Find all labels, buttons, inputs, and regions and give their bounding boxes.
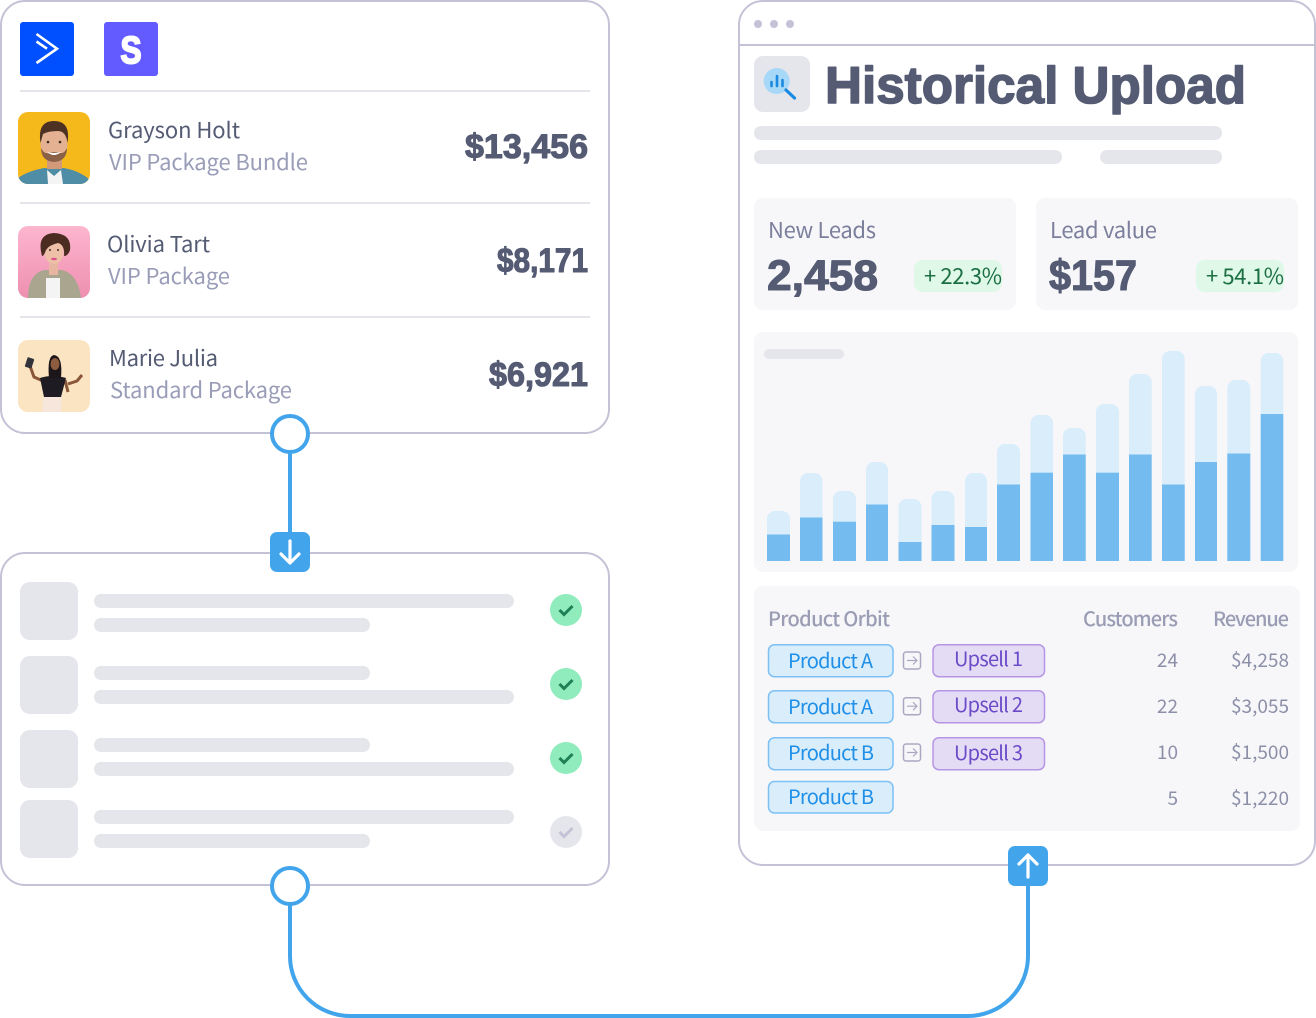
row: Marie Julia (18, 340, 588, 412)
name: Grayson Holt (108, 113, 240, 145)
stat card: Lead value (1036, 198, 1298, 310)
table row 1: $4,258 (1231, 646, 1289, 673)
table row 3: $1,500 (1231, 738, 1289, 765)
icon: check complete (550, 668, 582, 700)
stat card: New Leads: 2,458 (767, 252, 878, 300)
title: Historical Upload (825, 57, 1246, 115)
table: Product Orbit (754, 586, 1300, 831)
change badge: + 22.3% (924, 259, 1002, 291)
table row 1: Upsell 1 (954, 643, 1023, 672)
panel: Historical Upload window (739, 1, 1315, 865)
icon: Stripe logo (104, 22, 158, 76)
table row 2: Upsell 2 (954, 689, 1023, 718)
window dots (754, 20, 794, 28)
table row 1 (768, 643, 1289, 677)
avatar: Olivia Tart (18, 226, 90, 298)
table row 3: 10 (1157, 738, 1178, 765)
package: VIP Package (108, 259, 230, 291)
name: Olivia Tart (107, 227, 210, 259)
table header (768, 603, 1289, 632)
package: Standard Package (110, 373, 292, 405)
amount: $8,171 (497, 242, 588, 280)
table row 4: $1,220 (1231, 784, 1289, 811)
table row 1: 24 (1157, 646, 1178, 673)
icon: check complete (550, 594, 582, 626)
table row 2: 22 (1157, 692, 1178, 719)
table row 2: Product A (788, 691, 874, 720)
icon: arrow box (904, 652, 920, 669)
table row 4 (768, 781, 1289, 813)
avatar: Marie Julia (18, 340, 90, 412)
row: Olivia Tart (18, 226, 588, 298)
change badge: + 54.1% (1206, 259, 1284, 291)
table row 3: Product B (788, 737, 874, 766)
table row 2: $3,055 (1231, 692, 1289, 719)
table row 4: Product B (788, 781, 874, 810)
stat card: Lead value: Lead value (1050, 213, 1157, 245)
table row 3: Upsell 3 (954, 737, 1023, 766)
table row 3 (768, 737, 1289, 770)
icon: ActiveCampaign logo (20, 22, 74, 76)
list item 3 (20, 730, 582, 788)
avatar: Grayson Holt (18, 112, 90, 184)
arrow: list card to Historical Upload (272, 846, 1048, 1016)
bar chart (754, 332, 1298, 572)
amount: $6,921 (489, 356, 588, 394)
icon: arrow box (904, 698, 920, 715)
bars: dark values (767, 414, 1283, 561)
table header: Product Orbit (768, 603, 890, 632)
amount: $13,456 (465, 128, 588, 166)
table row 2 (768, 689, 1289, 723)
icon: arrow box (904, 744, 920, 761)
stat card: New Leads: New Leads (768, 213, 876, 245)
icon: chart magnifier (754, 56, 810, 112)
icon: check complete (550, 742, 582, 774)
icon: Stripe logo: S (120, 30, 142, 72)
panel: processing list card (1, 553, 609, 885)
table header: Revenue (1213, 603, 1289, 632)
description placeholder (754, 126, 1222, 164)
table header: Customers (1083, 603, 1178, 632)
package: VIP Package Bundle (109, 145, 308, 177)
row: Grayson Holt (18, 112, 588, 184)
stat card: New Leads (754, 198, 1016, 310)
bars: light totals (767, 351, 1283, 561)
arrow: sales card to list card (270, 416, 310, 572)
name: Marie Julia (109, 341, 218, 373)
table row 1: Product A (788, 645, 874, 674)
icon: check pending (550, 816, 582, 848)
list item 1 (20, 582, 582, 640)
stat card: Lead value: $157 (1049, 252, 1137, 300)
panel: sales card (1, 1, 609, 433)
table row 4: 5 (1167, 784, 1178, 811)
list item 2 (20, 656, 582, 714)
list item 4 (20, 800, 582, 858)
